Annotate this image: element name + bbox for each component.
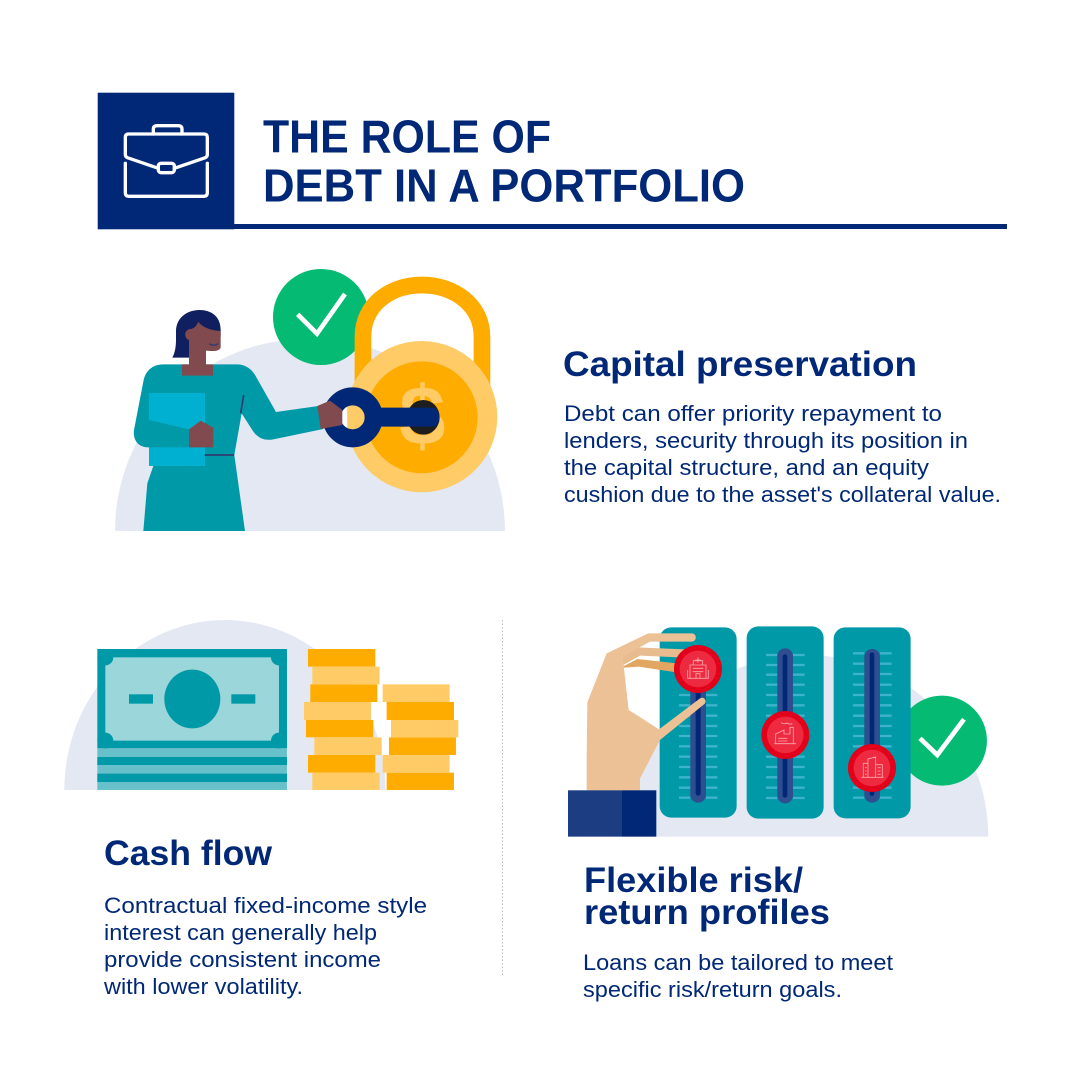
- slider panel 2: [747, 626, 824, 819]
- icon: padlock: [346, 285, 497, 492]
- text: flexible risk/return body: [583, 950, 893, 1002]
- icon: key: [332, 396, 439, 438]
- text: cash flow body: interest can generally help: [104, 920, 377, 945]
- folder: [149, 393, 205, 466]
- panel: cash flow illustration: [64, 620, 458, 790]
- icon: coin stacks: [304, 649, 458, 790]
- background semicircle: [625, 655, 988, 837]
- text: cash flow body: Contractual fixed-income style: [104, 893, 427, 918]
- knob: hospital: [674, 645, 722, 693]
- knob: factory: [761, 711, 809, 759]
- title: [263, 111, 745, 212]
- icon: green check badge: [273, 269, 369, 365]
- title: THE ROLE OF: [263, 111, 551, 163]
- text: cash flow body: with lower volatility.: [103, 974, 303, 999]
- header: [98, 93, 1007, 229]
- text: capital preservation body: the capital structure, and an equity: [564, 455, 929, 480]
- icon: padlock: $: [399, 369, 445, 462]
- icon: green check badge: [897, 696, 987, 786]
- figure: woman holding folder and key: [134, 310, 342, 531]
- text: cash flow body: provide consistent income: [104, 947, 381, 972]
- text: cash flow body: [103, 893, 427, 999]
- heading: capital preservation: Capital preservation: [563, 345, 917, 384]
- panel: flexible risk/return illustration: [568, 626, 988, 837]
- background semicircle: [115, 338, 505, 531]
- icon: banknote stack: [97, 649, 287, 790]
- header rule: [234, 224, 1007, 229]
- title: DEBT IN A PORTFOLIO: [263, 160, 745, 212]
- heading: flexible risk/return profiles: return profiles: [584, 893, 830, 932]
- hands: [189, 401, 342, 447]
- text: capital preservation body: Debt can offer priority repayment to: [564, 401, 942, 426]
- dress lines: [205, 395, 244, 455]
- smile: [209, 344, 218, 345]
- face and neck: [182, 322, 221, 376]
- heading: flexible risk/return profiles: [584, 861, 830, 932]
- skirt: [143, 455, 245, 531]
- hand: [568, 633, 706, 837]
- text: capital preservation body: cushion due to the asset's collateral value.: [564, 482, 1001, 507]
- slider panel 1: [660, 627, 737, 818]
- text: capital preservation body: [564, 401, 1001, 507]
- hair: [172, 310, 221, 358]
- panel: capital preservation illustration: [115, 269, 505, 531]
- heading: cash flow: Cash flow: [104, 834, 273, 873]
- background semicircle: [64, 620, 386, 790]
- knob: buildings: [848, 744, 896, 792]
- slider panel 3: [834, 627, 911, 818]
- heading: flexible risk/return profiles: Flexible risk/: [584, 861, 803, 900]
- icon: briefcase on navy square: [98, 93, 234, 229]
- text: flexible risk/return body: specific risk/return goals.: [583, 977, 842, 1002]
- torso and arms: [134, 364, 323, 455]
- text: flexible risk/return body: Loans can be tailored to meet: [583, 950, 893, 975]
- text: capital preservation body: lenders, security through its position in: [564, 428, 968, 453]
